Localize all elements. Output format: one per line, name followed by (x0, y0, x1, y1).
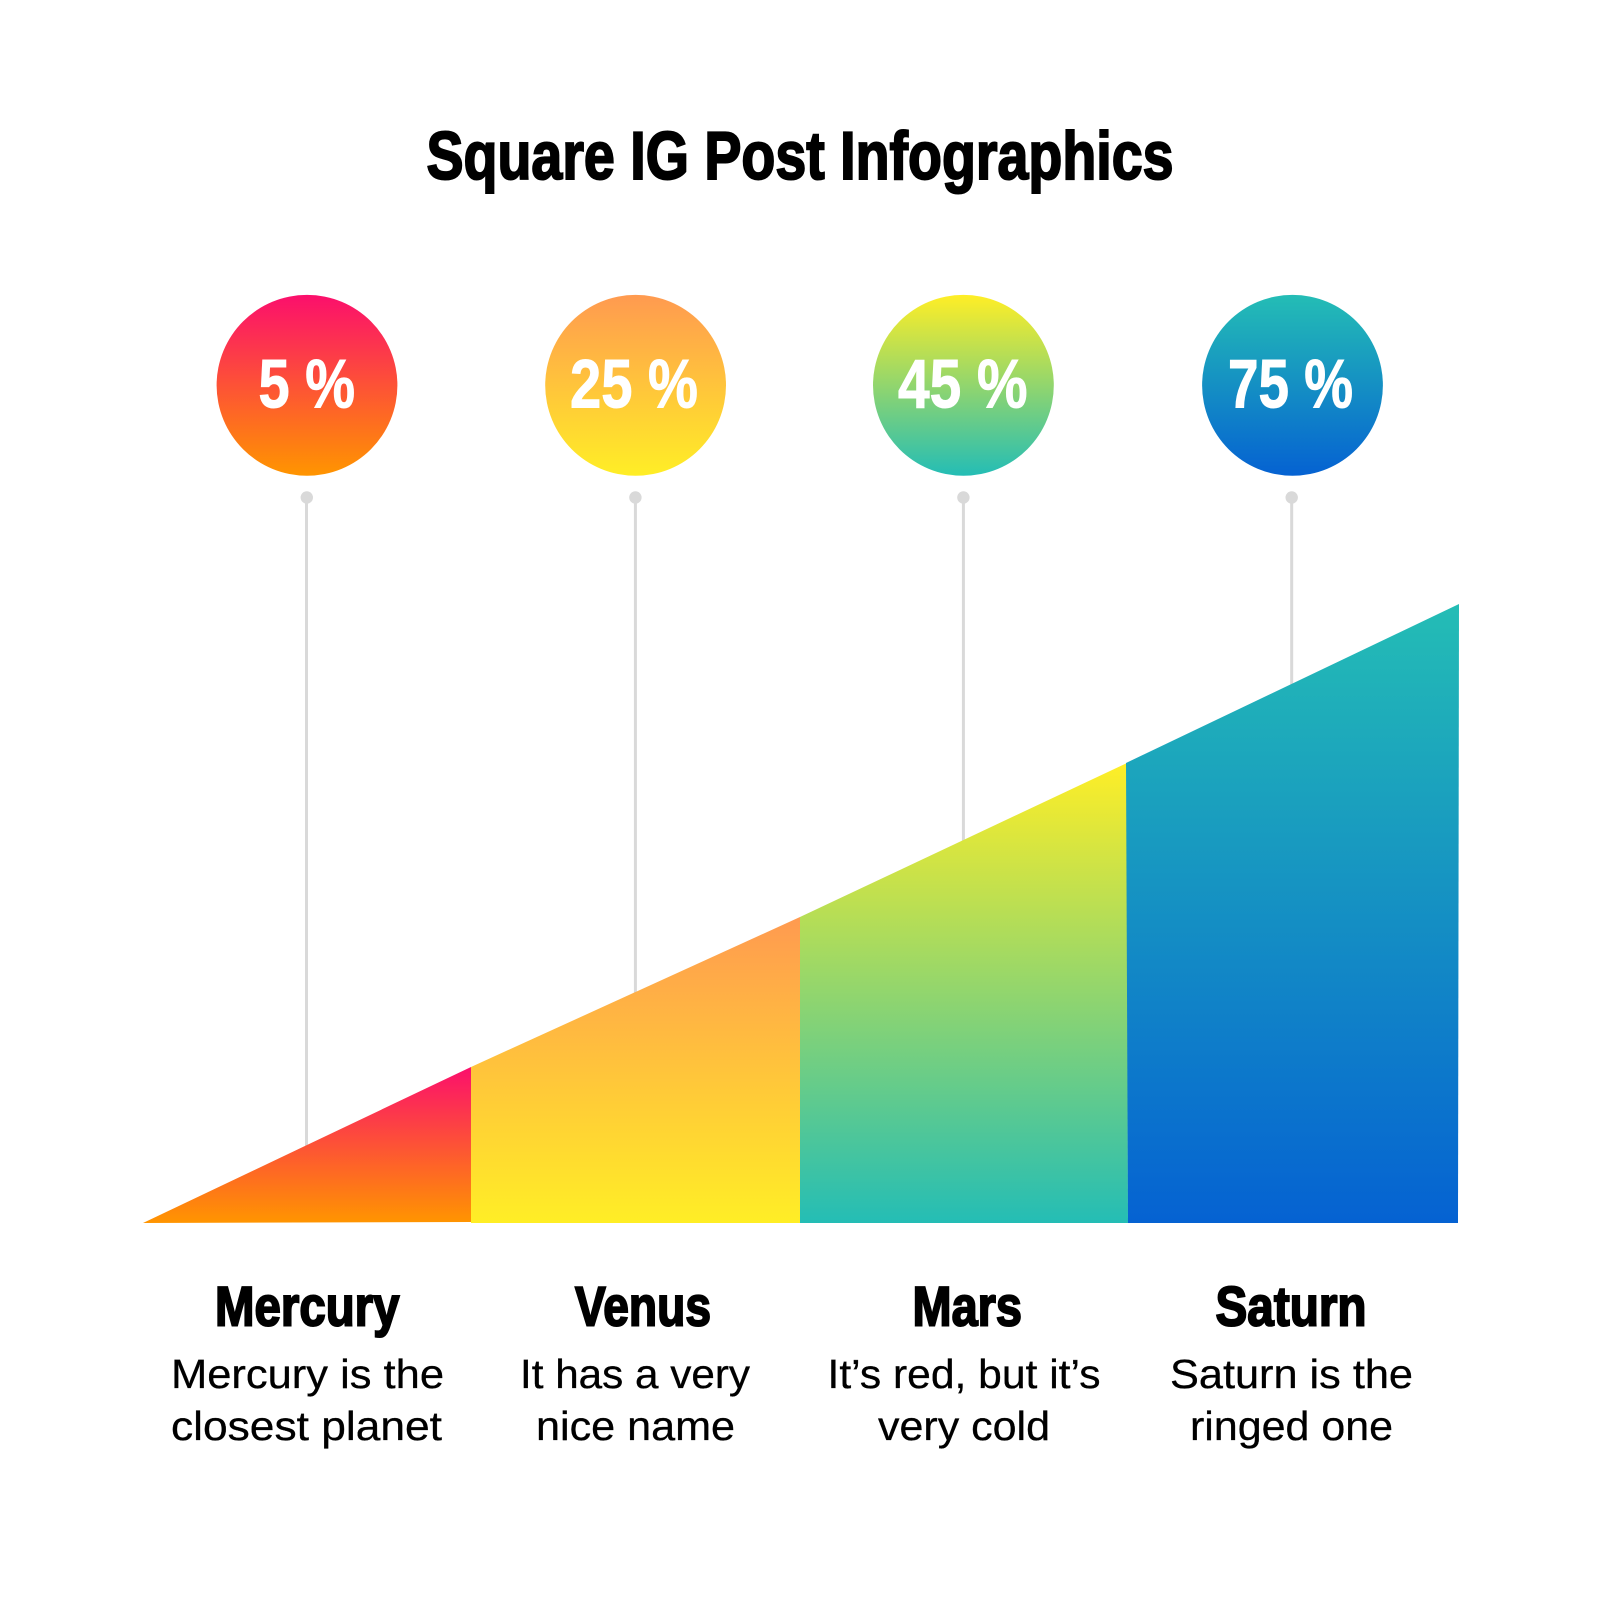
label: Saturn (1170, 1274, 1413, 1449)
percent badge: Saturn 75%: 75 % (1228, 346, 1353, 422)
connector: Mercury (301, 491, 313, 1147)
label: Venus: nice name (536, 1403, 735, 1449)
percent badge: Mercury 5% (217, 295, 397, 476)
wedge segment: Saturn (1126, 604, 1459, 1223)
label: Saturn: ringed one (1190, 1403, 1393, 1449)
label: Mercury: closest planet (171, 1403, 443, 1449)
title: Square IG Post Infographics (426, 118, 1174, 194)
percent badge: Mercury 5%: 5 % (258, 346, 355, 422)
label: Mercury (171, 1274, 444, 1449)
label: Saturn: Saturn is the (1170, 1351, 1413, 1397)
label: Mars: Mars (912, 1274, 1022, 1338)
wedge segment: Mercury (143, 1067, 471, 1223)
connector: Saturn (1286, 491, 1298, 689)
wedge segment: Mars (800, 763, 1128, 1223)
percent badge: Mars 45%: 45 % (898, 346, 1028, 422)
wedge segment: Venus (471, 917, 800, 1223)
percent badge: Saturn 75% (1202, 295, 1383, 476)
label: Mars (828, 1274, 1100, 1449)
label: Venus: It has a very (520, 1351, 751, 1397)
label: Mercury: Mercury is the (171, 1351, 444, 1397)
label: Mars: It’s red, but it’s (828, 1351, 1100, 1397)
wedge chart (143, 604, 1459, 1223)
percent badge: Venus 25% (545, 295, 726, 476)
connector: Venus (629, 491, 642, 997)
percent badge: Mars 45% (873, 295, 1054, 476)
percent badge: Venus 25%: 25 % (570, 346, 698, 422)
label: Saturn: Saturn (1216, 1274, 1366, 1338)
label: Mercury: Mercury (215, 1274, 400, 1338)
connector: Mars (957, 491, 970, 847)
label: Venus: Venus (575, 1274, 711, 1338)
label: Venus (520, 1274, 751, 1449)
connector lines (301, 491, 1298, 1147)
label: Mars: very cold (878, 1403, 1050, 1449)
